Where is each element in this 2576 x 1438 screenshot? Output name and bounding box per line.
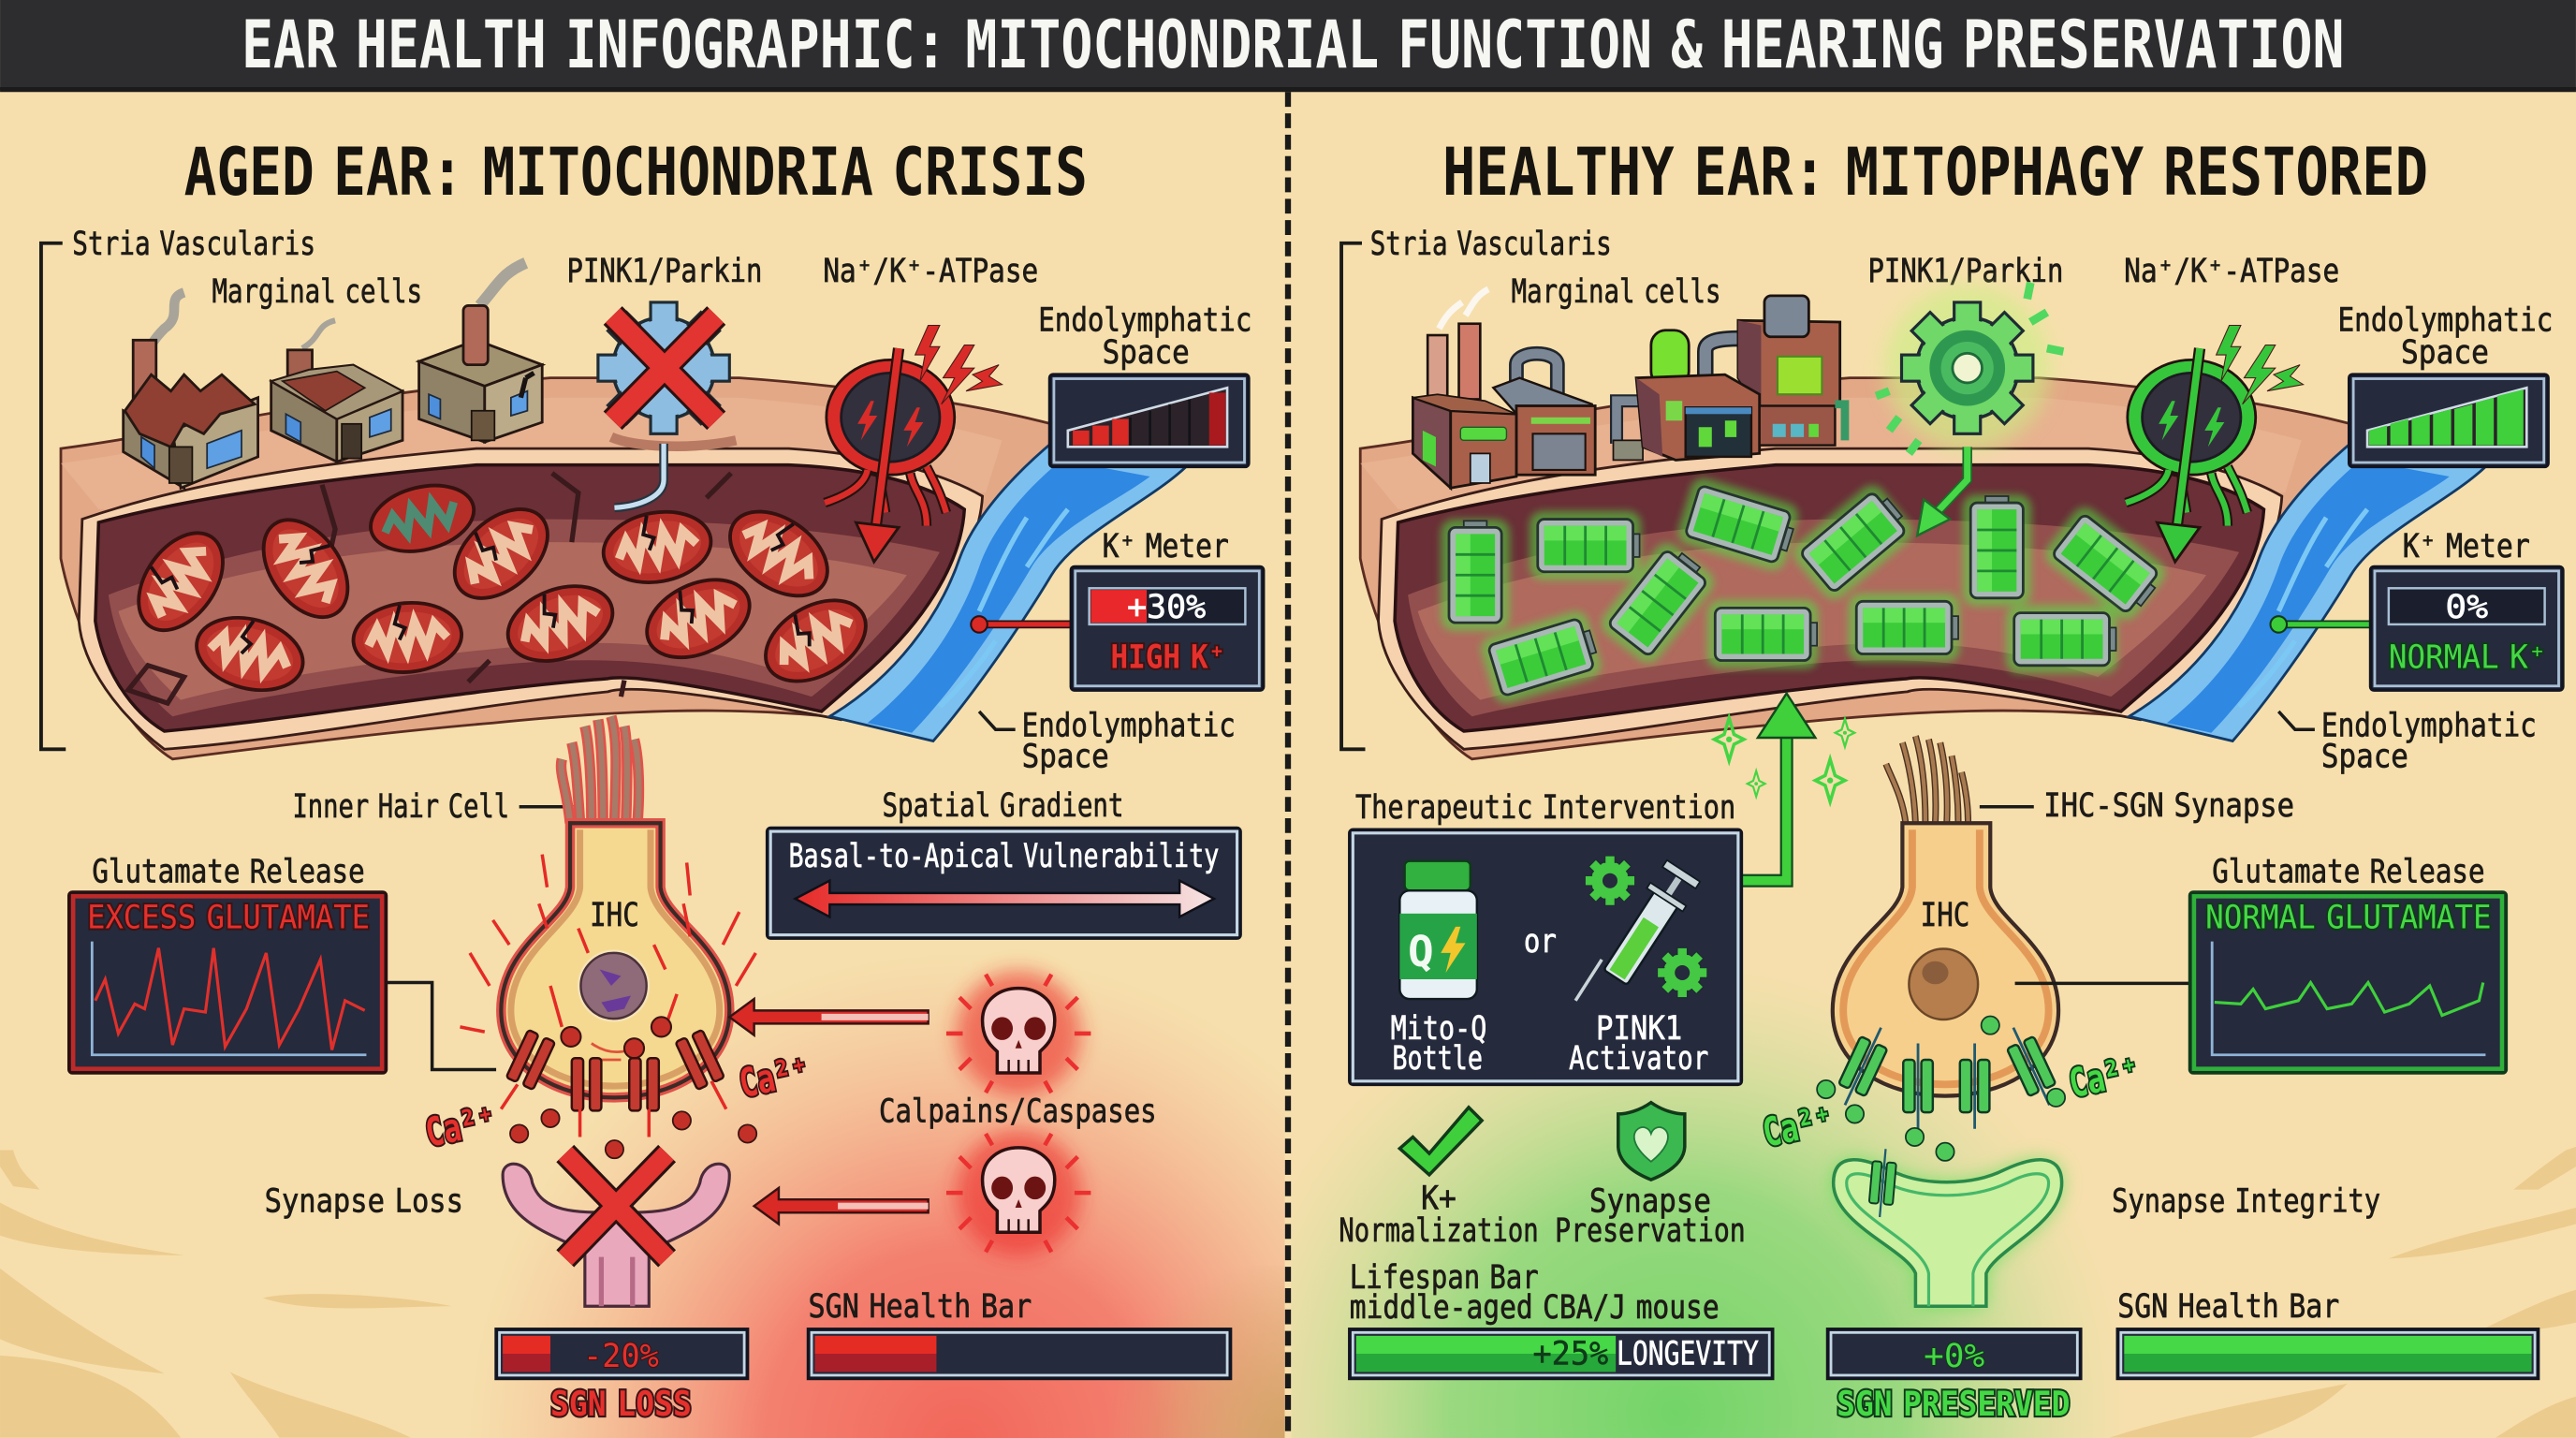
icon: skull calpains <box>946 971 1090 1096</box>
healthy factory complex <box>1412 289 1845 488</box>
damaged factory 3 <box>419 263 542 442</box>
label: pink1/parkin: PINK1/Parkin <box>1868 252 2063 290</box>
icon: Mito-Q bottle <box>1399 861 1477 999</box>
label: k+ meter: K⁺ Meter <box>1103 527 1229 565</box>
label: Ca2+ left: Ca²⁺ <box>421 1096 500 1156</box>
K+ meter panel: +30% <box>1127 588 1206 626</box>
label: Ca2+ right: Ca²⁺ <box>2065 1048 2144 1107</box>
panel: therapeutic intervention <box>1350 829 1741 1084</box>
icon: broken PINK1 gear with red X <box>598 302 736 507</box>
cracks in the tissue <box>128 473 731 703</box>
damaged mitochondria <box>122 476 880 701</box>
label: therapeutic intervention: Therapeutic Intervention <box>1355 788 1735 827</box>
label: endolymphatic space lower: Endolymphatic <box>2321 706 2537 744</box>
arrow: calpains to hair cell <box>729 999 929 1035</box>
heading: aged ear: AGED EAR: MITOCHONDRIA CRISIS <box>184 134 1088 211</box>
label: Ca2+ right: Ca²⁺ <box>735 1048 813 1107</box>
label: stria vascularis: Stria Vascularis <box>72 225 315 263</box>
label: Ca2+ left: Ca²⁺ <box>1759 1096 1837 1156</box>
label: marginal cells: Marginal cells <box>212 272 422 311</box>
synapse intact and glowing <box>1834 1148 2062 1306</box>
icon: glowing PINK1 gear and arrow <box>1876 283 2063 536</box>
label: IHC: IHC <box>1921 896 1969 934</box>
label: lifespan bar: Lifespan Bar <box>1350 1258 1539 1297</box>
label: endolymphatic space lower: Space <box>1022 738 1109 776</box>
panel: basal-to-apical vulnerability: Basal-to-Apical Vulnerability <box>788 837 1219 875</box>
label: SGN preserved: SGN PRESERVED <box>1837 1384 2070 1424</box>
chart: excess glutamate trace <box>69 892 386 1073</box>
label: synapse preservation <box>1555 1181 1746 1250</box>
icon: failing ion pump <box>825 325 1003 562</box>
label: endolymphatic space lower <box>979 706 1236 776</box>
title banner <box>0 0 2576 92</box>
label: PINK1 activator: Activator <box>1569 1039 1708 1078</box>
label: glutamate release: Glutamate Release <box>92 852 365 890</box>
label: endolymphatic space lower: Endolymphatic <box>1022 706 1236 744</box>
icon: shield with heart <box>1618 1103 1685 1180</box>
label: endolymphatic space upper: Endolymphatic <box>1038 301 1251 340</box>
icon: checkmark <box>1399 1108 1482 1175</box>
K+ meter panel: NORMAL K⁺ <box>2389 638 2546 676</box>
bar: +25% longevity: LONGEVITY <box>1617 1335 1759 1373</box>
K+ meter connector <box>2271 616 2371 633</box>
label: lifespan bar <box>1350 1258 1720 1327</box>
bar: +0% SGN <box>1828 1329 2081 1378</box>
label: K+ normalization: Normalization <box>1339 1211 1539 1250</box>
label: endolymphatic space upper: Space <box>1103 333 1190 372</box>
synapse destroyed with red X <box>503 1140 729 1306</box>
label: k+ meter: K⁺ Meter <box>2403 527 2530 565</box>
icon: skull caspases <box>946 1130 1090 1255</box>
healthy mitochondria as charged batteries <box>1441 475 2171 707</box>
K+ meter panel <box>2371 566 2563 690</box>
label: IHC-SGN synapse: IHC-SGN Synapse <box>2043 786 2294 825</box>
label: K+ normalization <box>1339 1180 1539 1250</box>
label: synapse integrity: Synapse Integrity <box>2112 1181 2380 1220</box>
label: inner hair cell: Inner Hair Cell <box>292 787 509 826</box>
bar: SGN health aged <box>809 1329 1231 1378</box>
stria tissue and endolymph river <box>61 378 1186 759</box>
K+ meter panel: HIGH K⁺ <box>1110 638 1225 676</box>
panel: basal-to-apical vulnerability <box>768 829 1240 938</box>
label: synapse loss: Synapse Loss <box>265 1181 463 1220</box>
inner hair cell: healthy <box>1817 736 2065 1161</box>
label: endolymphatic space lower: Space <box>2321 738 2408 776</box>
label: spatial gradient: Spatial Gradient <box>883 786 1123 825</box>
bracket: stria vascularis <box>1341 243 1365 749</box>
label: endolymphatic space lower <box>2278 706 2537 776</box>
icon: healthy ion pump <box>2126 325 2304 562</box>
label: PINK1 activator <box>1569 1009 1708 1078</box>
label: glutamate release: Glutamate Release <box>2212 852 2485 890</box>
K+ meter panel: 0% <box>2445 588 2488 626</box>
label: endolymphatic space upper <box>2337 301 2553 372</box>
chart: normal glutamate trace: NORMAL GLUTAMATE <box>2205 899 2492 937</box>
label: pink1/parkin: PINK1/Parkin <box>567 252 762 290</box>
label: Na/K ATPase: Na⁺/K⁺-ATPase <box>823 252 1038 290</box>
label: synapse preservation: Preservation <box>1555 1211 1746 1250</box>
bar: +25% longevity: +25% <box>1532 1335 1608 1373</box>
label: PINK1 activator: PINK1 <box>1596 1009 1682 1048</box>
label: stria vascularis: Stria Vascularis <box>1370 225 1612 263</box>
label: endolymphatic space upper: Space <box>2401 333 2489 372</box>
panel: healthy ear <box>1339 134 2563 1424</box>
icon: PINK1 activator syringe <box>1575 856 1707 1001</box>
center dashed divider <box>1286 92 1290 1438</box>
bracket: stria vascularis <box>41 243 66 749</box>
label: synapse preservation: Synapse <box>1589 1181 1711 1220</box>
label: or: or <box>1524 922 1557 961</box>
sparkles <box>1714 718 1854 801</box>
stria tissue and endolymph river <box>1360 378 2485 759</box>
label: calpains/caspases: Calpains/Caspases <box>879 1093 1157 1131</box>
label: Mito-Q bottle: Bottle <box>1392 1039 1483 1078</box>
chart: normal glutamate trace <box>2190 892 2506 1073</box>
damaged factory 2 <box>271 320 402 462</box>
label: IHC: IHC <box>590 896 639 934</box>
chart: excess glutamate trace: EXCESS GLUTAMATE <box>87 899 370 937</box>
bar: +25% longevity <box>1350 1329 1773 1378</box>
bar: -20% SGN loss <box>496 1329 748 1378</box>
inner hair cell: stressed <box>460 716 756 1143</box>
label: Na/K ATPase: Na⁺/K⁺-ATPase <box>2124 252 2339 290</box>
label: K+ normalization: K+ <box>1421 1180 1456 1218</box>
label: endolymphatic space upper <box>1038 301 1251 372</box>
label: marginal cells: Marginal cells <box>1512 272 1720 311</box>
label: lifespan bar: middle-aged CBA/J mouse <box>1350 1288 1720 1327</box>
bar: -20% SGN loss: -20% <box>583 1337 659 1375</box>
icon: Mito-Q bottle: Q <box>1408 927 1434 976</box>
gauge: full endolymphatic potential <box>2349 374 2548 466</box>
bar: +0% SGN: +0% <box>1924 1337 1984 1375</box>
label: Mito-Q bottle <box>1391 1009 1486 1078</box>
connector: cell to glutamate chart <box>2015 982 2190 984</box>
label: SGN loss: SGN LOSS <box>550 1384 692 1424</box>
gauge: low endolymphatic potential <box>1050 374 1249 466</box>
label: Mito-Q bottle: Mito-Q <box>1391 1009 1486 1048</box>
label: SGN health bar aged: SGN Health Bar <box>809 1287 1032 1326</box>
arrow: therapy up to stria <box>1741 694 1815 881</box>
damaged factory 1 <box>124 292 258 488</box>
bar: SGN health healthy <box>2117 1329 2539 1378</box>
arrow: caspases to synapse <box>754 1188 929 1224</box>
K+ meter panel <box>1071 566 1264 690</box>
K+ meter connector <box>971 616 1071 633</box>
connector: glutamate to synapse <box>386 983 496 1070</box>
label: SGN health bar healthy: SGN Health Bar <box>2117 1287 2339 1326</box>
panel: aged ear <box>41 134 1264 1424</box>
